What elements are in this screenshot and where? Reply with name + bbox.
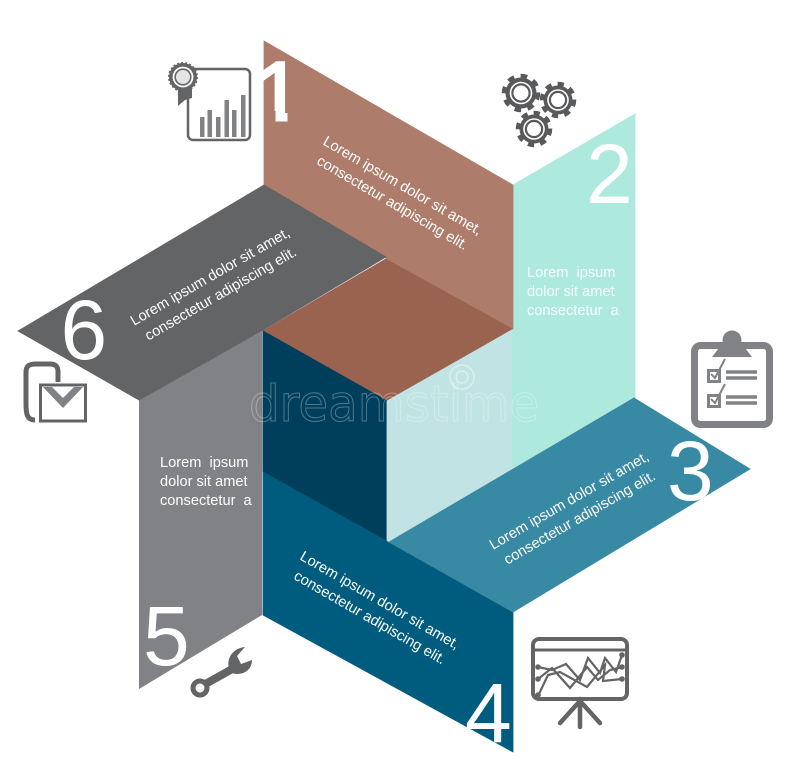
icon: gears xyxy=(504,76,574,145)
icon: phone and mail xyxy=(26,364,86,421)
watermark: dreamstime xyxy=(249,375,539,433)
text block 3: Lorem ipsum dolor sit amet, xyxy=(487,449,652,553)
icon: clipboard checklist xyxy=(694,330,770,424)
icon: wrench xyxy=(193,647,252,695)
icon: certificate chart xyxy=(169,63,250,140)
panel 5: grey wall xyxy=(139,331,262,689)
number 6: 6 xyxy=(60,283,107,377)
text block 6: Lorem ipsum dolor sit amet, xyxy=(128,225,293,329)
panel 2: mint wall xyxy=(512,114,635,470)
text block 6: consectetur adipiscing elit. xyxy=(142,244,300,344)
text block 3: consectetur adipiscing elit. xyxy=(501,468,659,568)
text block 4: Lorem ipsum dolor sit amet, xyxy=(297,549,462,653)
panel 4: blue floor xyxy=(263,472,513,760)
number 2: 2 xyxy=(586,127,633,221)
icon: presentation board xyxy=(533,639,627,727)
number 1: 1 xyxy=(255,45,302,139)
text block 1: consectetur adipiscing elit. xyxy=(314,153,471,254)
text block 1: Lorem ipsum dolor sit amet, xyxy=(320,134,485,239)
number 5: 5 xyxy=(143,589,190,683)
cube top face xyxy=(263,259,512,401)
text block 2: Lorem ipsum xyxy=(527,265,615,281)
panel 1: brown wall xyxy=(255,41,513,329)
cube right face xyxy=(387,330,512,542)
cube left face xyxy=(263,331,387,542)
text block 2: consectetur a xyxy=(527,303,620,319)
text block 4: consectetur adipiscing elit. xyxy=(291,568,448,668)
number 3: 3 xyxy=(667,424,714,518)
text block 5: dolor sit amet xyxy=(160,474,248,490)
text block 2: dolor sit amet xyxy=(527,284,615,300)
text block 5: Lorem ipsum xyxy=(160,455,248,471)
text block 5: consectetur a xyxy=(160,493,253,509)
panel 3: teal floor xyxy=(389,398,750,612)
number 4: 4 xyxy=(465,666,512,760)
panel 6: dark grey floor xyxy=(18,185,386,400)
